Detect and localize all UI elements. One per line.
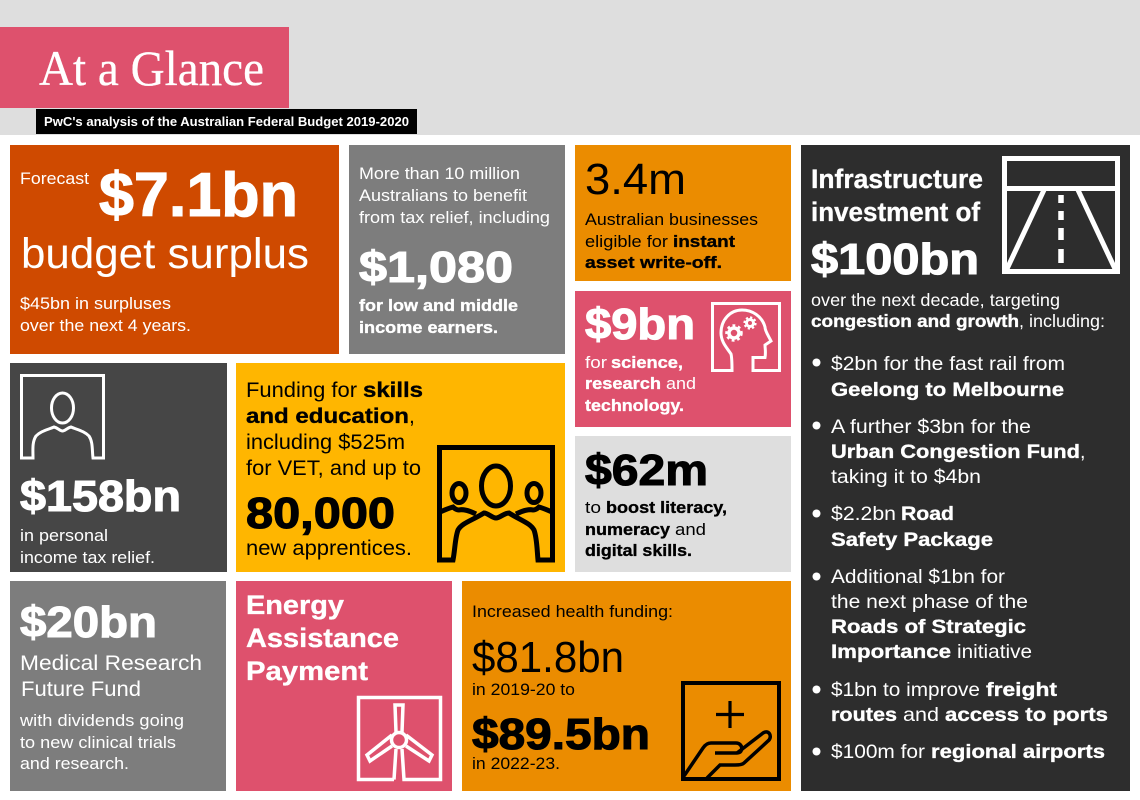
panel: health funding — [462, 581, 791, 791]
panel: skills and education: including $525m — [246, 431, 405, 454]
header band — [0, 0, 1140, 135]
panel: budget surplus — [10, 145, 339, 354]
subtitle: PwC's analysis of the Australian Federal Budget 2019-2020 — [44, 114, 409, 129]
panel: tax relief: Australians to benefit — [359, 186, 527, 205]
bullet list: Roads of Strategic — [831, 616, 1026, 638]
bullet list: $1bn to improve — [831, 679, 980, 701]
panel: personal income tax relief: income tax relief. — [20, 548, 155, 567]
panel: energy assistance payment: Assistance — [246, 623, 399, 653]
panel: health funding: in 2019-20 to — [472, 680, 575, 699]
panel: medical research future fund: Medical Research — [20, 651, 202, 675]
panel: science and research: $9bn — [585, 300, 695, 349]
title — [0, 27, 289, 108]
heading — [811, 164, 983, 284]
panel: medical research future fund: and research. — [20, 754, 129, 773]
bullet list: A further $3bn for the — [831, 416, 1031, 438]
panel: infrastructure investment — [801, 145, 1130, 791]
bullet list: the next phase of the — [831, 591, 1028, 613]
bullet list: initiative — [957, 641, 1032, 663]
bullet list — [812, 353, 1108, 763]
panel: budget surplus: Forecast — [20, 169, 89, 188]
icon: person — [22, 376, 104, 458]
panel: skills and education: 80,000 — [246, 489, 395, 538]
bullet list: Safety Package — [831, 529, 993, 551]
panel: tax relief: for low and middle — [359, 296, 518, 315]
title: At a Glance — [39, 40, 264, 96]
panel: personal income tax relief — [10, 363, 227, 572]
intro text — [811, 290, 1105, 331]
panel: tax relief — [349, 145, 565, 354]
panel: science and research: and — [666, 374, 696, 393]
bullet list: routes — [831, 704, 897, 726]
panel: medical research future fund: to new clinical trials — [20, 733, 176, 752]
panel: health funding: Increased health funding: — [472, 602, 673, 621]
panel: instant asset write-off: instant — [673, 232, 735, 251]
panel: health funding: in 2022-23. — [472, 754, 560, 773]
bullet list: freight — [986, 679, 1058, 701]
panel: skills and education: for VET, and up to — [246, 457, 421, 480]
panel: tax relief: income earners. — [359, 318, 498, 337]
panel: instant asset write-off: asset write-off. — [585, 253, 722, 272]
panel: instant asset write-off — [575, 145, 791, 281]
panel: budget surplus: $45bn in surpluses — [20, 294, 171, 313]
panel: skills and education: Funding for — [246, 379, 357, 402]
bullet list: Urban Congestion Fund — [831, 441, 1080, 463]
icon: group of people — [440, 448, 552, 560]
bullet list: $2bn for the fast rail from — [831, 353, 1065, 375]
bullet list: $100m for — [831, 741, 926, 763]
panel: skills and education: skills — [363, 379, 423, 402]
panel: medical research future fund: with dividends going — [19, 711, 184, 730]
panel: science and research — [575, 291, 791, 427]
heading: $100bn — [811, 235, 979, 284]
panel: health funding: $89.5bn — [472, 710, 650, 759]
bullet list: Geelong to Melbourne — [831, 379, 1064, 401]
panel: instant asset write-off: eligible for — [585, 232, 668, 251]
panel: personal income tax relief: $158bn — [20, 472, 181, 521]
panel: literacy and numeracy: $62m — [585, 446, 708, 495]
panel: medical research future fund: Future Fund — [21, 677, 141, 701]
panel: energy assistance payment: Payment — [246, 656, 368, 686]
panel: literacy and numeracy: boost literacy, — [606, 498, 727, 517]
icon: head with gears — [712, 304, 780, 370]
intro text: , including: — [1019, 311, 1105, 331]
bullet list: Importance — [831, 641, 951, 663]
subtitle — [36, 109, 417, 134]
heading: Infrastructure — [811, 164, 983, 194]
panel: literacy and numeracy — [575, 436, 791, 572]
panel: energy assistance payment: Energy — [246, 590, 344, 620]
panel: literacy and numeracy: numeracy — [585, 520, 671, 539]
panel: instant asset write-off: 3.4m — [585, 155, 686, 204]
panel: skills and education — [236, 363, 565, 572]
panel: science and research: for — [585, 353, 607, 372]
panel: science and research: research — [585, 374, 661, 393]
panel: tax relief: from tax relief, including — [359, 208, 550, 227]
panel: skills and education: , — [409, 405, 415, 428]
bullet list: regional airports — [931, 741, 1105, 763]
bullet list: and — [903, 704, 939, 726]
panel: tax relief: More than 10 million — [359, 164, 520, 183]
bullet list: taking it to $4bn — [831, 466, 981, 488]
panel: personal income tax relief: in personal — [20, 526, 108, 545]
bullet list: Road — [901, 503, 954, 525]
panel: medical research future fund — [10, 581, 226, 791]
panel: science and research: science, — [611, 353, 683, 372]
bullet list: $2.2bn — [831, 503, 896, 525]
panel: skills and education: and education — [246, 405, 409, 428]
panel: instant asset write-off: Australian businesses — [585, 210, 758, 229]
panel: tax relief: $1,080 — [359, 243, 513, 292]
panel: budget surplus: $7.1bn — [99, 161, 298, 230]
icon: hand with plus — [683, 683, 779, 779]
panel: skills and education: new apprentices. — [246, 537, 412, 560]
heading: investment of — [811, 197, 980, 227]
panel: energy assistance payment — [236, 581, 452, 791]
bullet list: , — [1080, 441, 1085, 463]
panel: budget surplus: over the next 4 years. — [20, 316, 191, 335]
icon: road — [1004, 158, 1118, 272]
panel: health funding: $81.8bn — [472, 633, 624, 682]
intro text: congestion and growth — [811, 311, 1019, 331]
panel: medical research future fund: $20bn — [20, 598, 157, 647]
panel: science and research: technology. — [585, 396, 684, 415]
icon: wind turbine — [358, 698, 440, 780]
bullet list: access to ports — [945, 704, 1108, 726]
panel: literacy and numeracy: digital skills. — [585, 541, 692, 560]
panel: budget surplus: budget surplus — [21, 230, 309, 278]
panel: literacy and numeracy: and — [675, 520, 706, 539]
panel: literacy and numeracy: to — [585, 498, 601, 517]
bullet list: Additional $1bn for — [831, 566, 1006, 588]
intro text: over the next decade, targeting — [811, 290, 1060, 310]
